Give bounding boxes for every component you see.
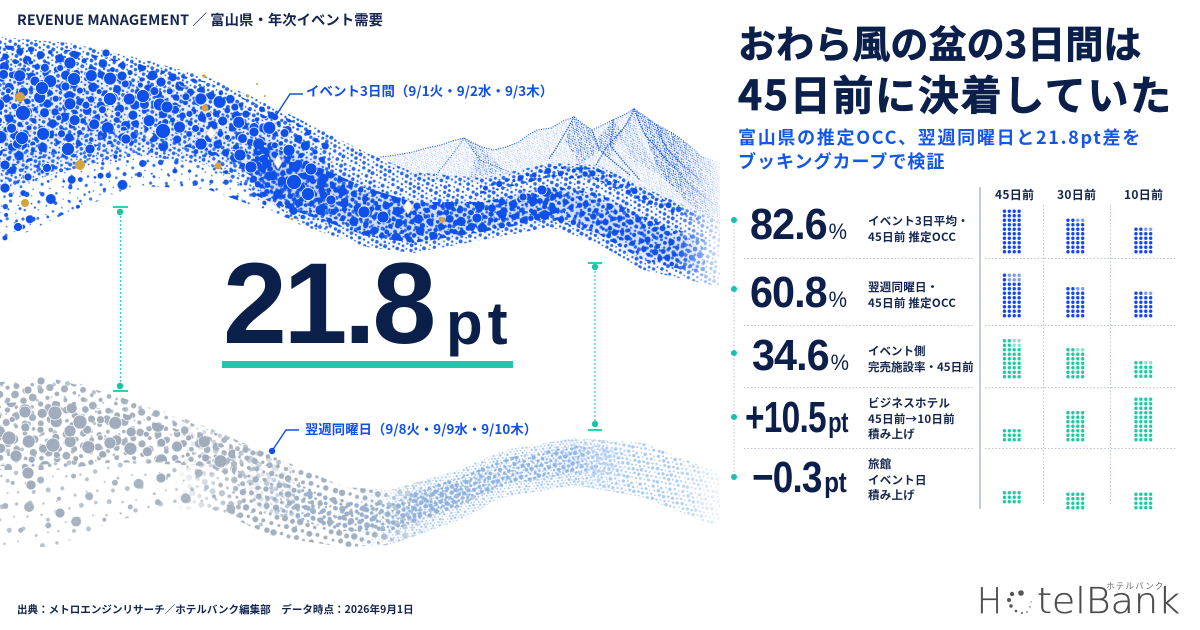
gold accents [15,74,445,223]
grey small dots [0,377,300,547]
right fade [675,100,720,300]
grey big dots [0,401,235,478]
big number: 21.8 pt [222,240,513,368]
label: 45日前 推定OCC [868,228,956,244]
label [868,343,974,374]
row 4 stat [745,393,955,442]
header 10 days: 10日前 [1124,186,1163,203]
row 4 bars [1002,397,1153,442]
label [868,279,956,310]
label: 積み上げ [868,487,915,503]
timeline markers [731,217,737,480]
pale right dots [541,438,720,524]
bracket: right gap marker [588,262,602,431]
label: ビジネスホテル [868,395,950,411]
chart: upper dot wave for event days [0,37,720,286]
value: 60.8% [750,268,847,317]
label: 45日前→10日前 [868,410,955,426]
white sparkles [106,109,413,214]
right fade [675,440,720,540]
heading: section label: REVENUE MANAGEMENT ／ 富山県・年次イベント需要 [17,9,383,30]
core tint [255,137,700,270]
title: おわら風の盆の3日間は [738,14,1142,69]
callout text: 翌週同曜日（9/8火・9/9水・9/10木） [305,419,537,438]
label: 翌週同曜日・ [868,279,938,295]
right upper ridge dots [480,166,700,224]
callout text: イベント3日間（9/1火・9/2水・9/3木） [306,80,553,100]
subtitle: 富山県の推定OCC、翌週同曜日と21.8pt差を [738,124,1142,150]
bracket: left gap marker [113,206,128,392]
header 45 days: 45日前 [995,186,1034,203]
logo: HotelBank [977,580,1180,622]
large grey dots [2,377,166,518]
label: 完売施設率・45日前 [868,358,974,374]
left medium dots [0,45,330,205]
source footer: 出典：メトロエンジンリサーチ／ホテルバンク編集部 データ時点：2026年9月1日 [17,602,414,617]
illustration: mountains [380,108,720,234]
label [868,395,955,442]
row 2 stat [750,268,956,317]
grey sparse lower dots [0,462,240,546]
value: −0.3pt [752,453,846,502]
label: イベント3日平均・ [868,213,969,229]
value: 34.6% [752,331,849,380]
wave tint [0,70,330,205]
teal underline [222,361,513,368]
label [868,456,927,503]
right lower band dots [520,186,705,275]
row 1 stat [750,200,969,249]
large dots [0,49,547,232]
blue-grey dots [352,438,628,546]
logo dot ring [1007,590,1032,614]
row 3 bars [1002,338,1153,379]
grey upper medium dots [0,379,300,505]
header 30 days: 30日前 [1057,186,1096,203]
label [868,213,969,244]
logo katakana: ホテルバンク [1106,580,1165,592]
label: 積み上げ [868,426,915,442]
logo: HotelBank: telBank [1037,581,1180,622]
value: 82.6% [750,200,847,249]
column headers [995,186,1163,203]
row 1 bars [1002,209,1153,254]
label: 旅館 [868,456,892,472]
logo: HotelBank: H [977,581,1002,622]
value: 21.8 [223,240,433,368]
row 3 stat [752,331,974,380]
unit: pt [446,290,513,357]
row 5 stat [752,453,927,503]
transition dots [179,417,440,547]
label: 45日前 推定OCC [868,294,956,310]
middle core dots [255,137,565,243]
row 5 bars [1002,490,1153,510]
title [738,14,1173,122]
left sparse lower dots [0,130,330,245]
title: 45日前に決着していた [738,62,1173,122]
row 2 bars [1002,273,1153,318]
label: イベント日 [868,472,927,488]
subtitle: ブッキングカーブで検証 [738,148,945,174]
subtitle [738,124,1142,174]
callout leader [272,93,303,120]
label: イベント側 [868,343,926,359]
tiny dots base [0,37,720,287]
chart: lower dot wave for following week [0,377,720,547]
callout leader [268,429,299,454]
callout: event days [272,80,553,120]
callout: following week [268,419,537,454]
value: +10.5pt [745,393,848,442]
left big dots [0,60,295,180]
